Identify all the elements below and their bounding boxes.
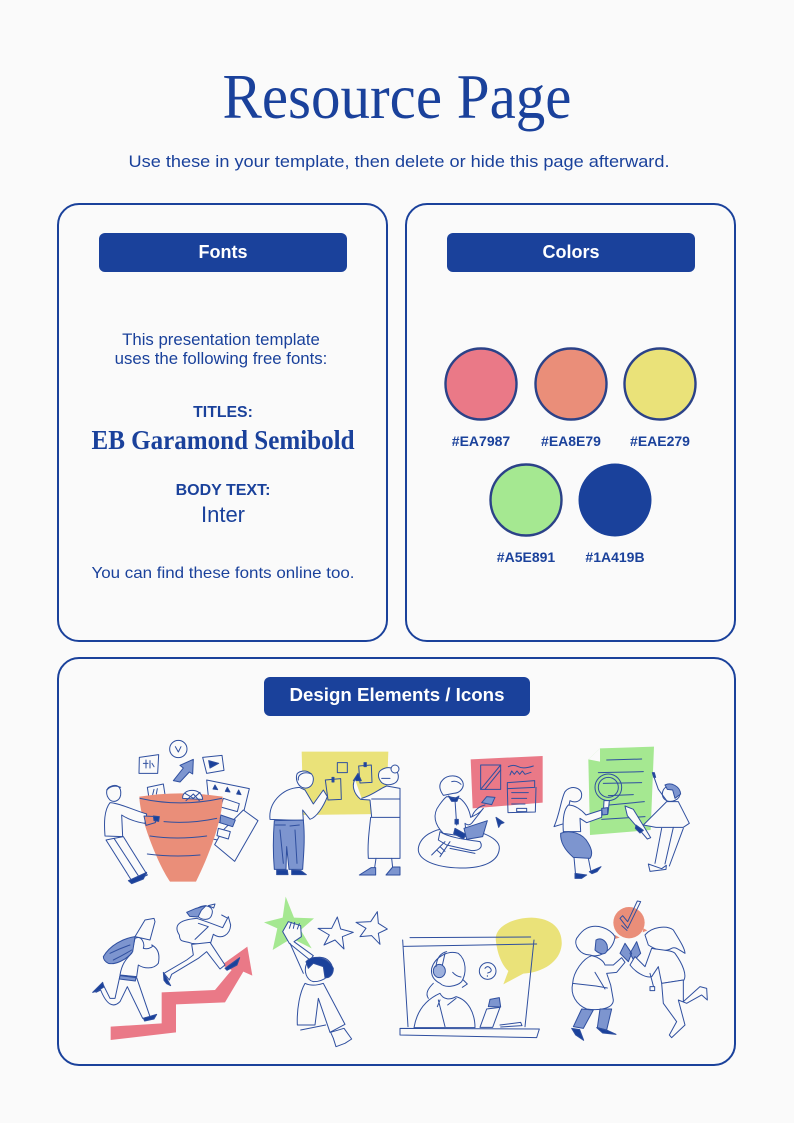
design elements heading: Design Elements / Icons — [290, 684, 504, 705]
swatch: A5E891: #A5E891 — [497, 549, 555, 565]
title: Resource Page — [222, 61, 572, 132]
illustration: runners on rising arrow — [93, 904, 252, 1040]
illustration: video call — [400, 918, 562, 1038]
design elements heading — [264, 677, 530, 716]
panel: colors — [406, 204, 735, 641]
swatch: 1A419B — [578, 464, 652, 565]
fonts heading: Fonts — [198, 242, 248, 262]
swatch: EA8E79 — [536, 348, 606, 449]
colors heading — [447, 233, 695, 272]
colors heading: Colors — [542, 242, 600, 262]
panel: fonts — [58, 204, 387, 641]
panel: design elements — [58, 658, 735, 1065]
titles font name: EB Garamond Semibold — [92, 425, 354, 455]
titles font label: TITLES: — [193, 404, 253, 421]
illustration: reaching for stars — [264, 897, 387, 1047]
illustration: high five — [572, 901, 707, 1040]
swatch: EAE279: #EAE279 — [630, 433, 690, 449]
swatch: EAE279 — [624, 348, 696, 449]
subtitle: Use these in your template, then delete or hide this page afterward. — [128, 153, 670, 171]
fonts intro text: This presentation template — [122, 330, 320, 349]
fonts intro text: uses the following free fonts: — [115, 349, 327, 368]
swatch: EA7987: #EA7987 — [452, 433, 510, 449]
swatch: A5E891 — [490, 464, 562, 565]
illustration: planning board — [270, 752, 400, 875]
swatch: EA8E79: #EA8E79 — [541, 433, 601, 449]
fonts intro text — [115, 330, 327, 368]
illustration: marketing funnel — [105, 740, 258, 884]
body font label: BODY TEXT: — [176, 482, 270, 499]
swatch: EA7987 — [446, 348, 516, 449]
fonts heading — [99, 233, 347, 272]
illustration: document review — [554, 747, 689, 878]
body font name: Inter — [201, 502, 245, 527]
swatch: 1A419B: #1A419B — [585, 549, 645, 565]
illustration: woman on beanbag — [418, 756, 543, 868]
fonts note: You can find these fonts online too. — [92, 565, 354, 582]
